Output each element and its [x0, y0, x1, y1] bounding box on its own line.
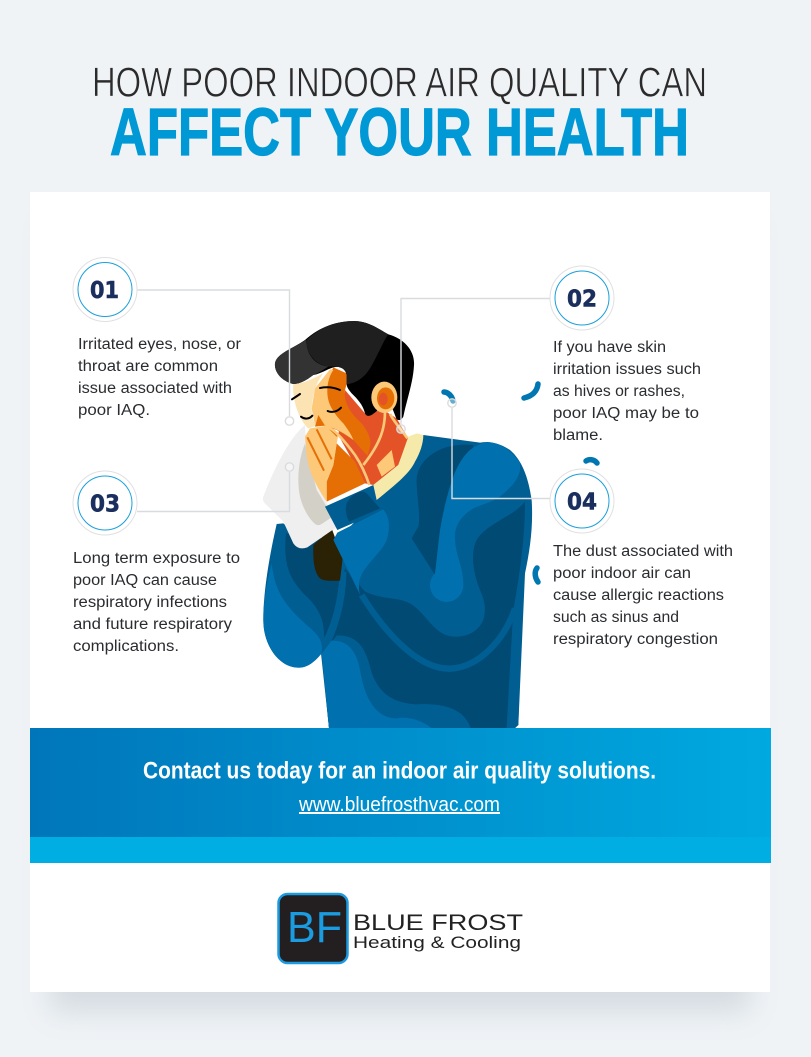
title [92, 58, 707, 170]
logo: BF [287, 904, 342, 952]
collar [373, 433, 423, 500]
eyes [292, 387, 341, 419]
callout 02: as hives or rashes, [553, 383, 685, 400]
torso [321, 435, 532, 728]
callout 02: poor IAQ may be to [553, 405, 699, 422]
illustration: man coughing [263, 321, 532, 728]
callout 02: If you have skin [553, 339, 666, 356]
callout 04: 04 [567, 490, 597, 516]
callout 01: poor IAQ. [78, 402, 150, 419]
hair [275, 321, 414, 420]
right sleeve [325, 485, 383, 530]
contact banner: www.bluefrosthvac.com [298, 794, 500, 816]
callout 04: The dust associated with [553, 543, 733, 560]
logo [278, 894, 523, 963]
callout 03: respiratory infections [73, 594, 227, 611]
left sleeve [263, 523, 342, 668]
logo: Heating & Cooling [353, 933, 521, 952]
callout 04 [550, 469, 733, 648]
callout 03: complications. [73, 638, 179, 655]
icon: droplets [444, 384, 597, 582]
callout 03: Long term exposure to [73, 550, 240, 567]
towel [263, 425, 337, 548]
panel: main card [30, 192, 770, 992]
callout 04: respiratory congestion [553, 631, 718, 648]
callout 04: poor indoor air can [553, 565, 691, 582]
callout 01: issue associated with [78, 380, 232, 397]
neck tendons [363, 412, 407, 465]
connector lines [137, 290, 552, 512]
callout 03: poor IAQ can cause [73, 572, 217, 589]
contact banner: Contact us today for an indoor air quality solutions. [143, 758, 656, 784]
callout 01 [73, 258, 241, 419]
callout 02: 02 [567, 286, 597, 312]
shirt [313, 528, 343, 581]
callout 03: 03 [90, 492, 120, 518]
callout 02 [550, 266, 701, 444]
callout 03: and future respiratory [73, 616, 232, 633]
callout 03 [73, 471, 240, 655]
callout 01: throat are common [78, 358, 218, 375]
contact banner [30, 728, 771, 863]
callout 01: Irritated eyes, nose, or [78, 336, 241, 353]
callout 04: such as sinus and [553, 609, 679, 626]
hand [327, 443, 365, 502]
callout 02: irritation issues such [553, 361, 701, 378]
ear [371, 382, 397, 413]
callout 01: 01 [90, 278, 119, 304]
neck and face [338, 390, 408, 485]
callout 02: blame. [553, 427, 603, 444]
callout 04: cause allergic reactions [553, 587, 724, 604]
logo: BLUE FROST [353, 910, 523, 935]
